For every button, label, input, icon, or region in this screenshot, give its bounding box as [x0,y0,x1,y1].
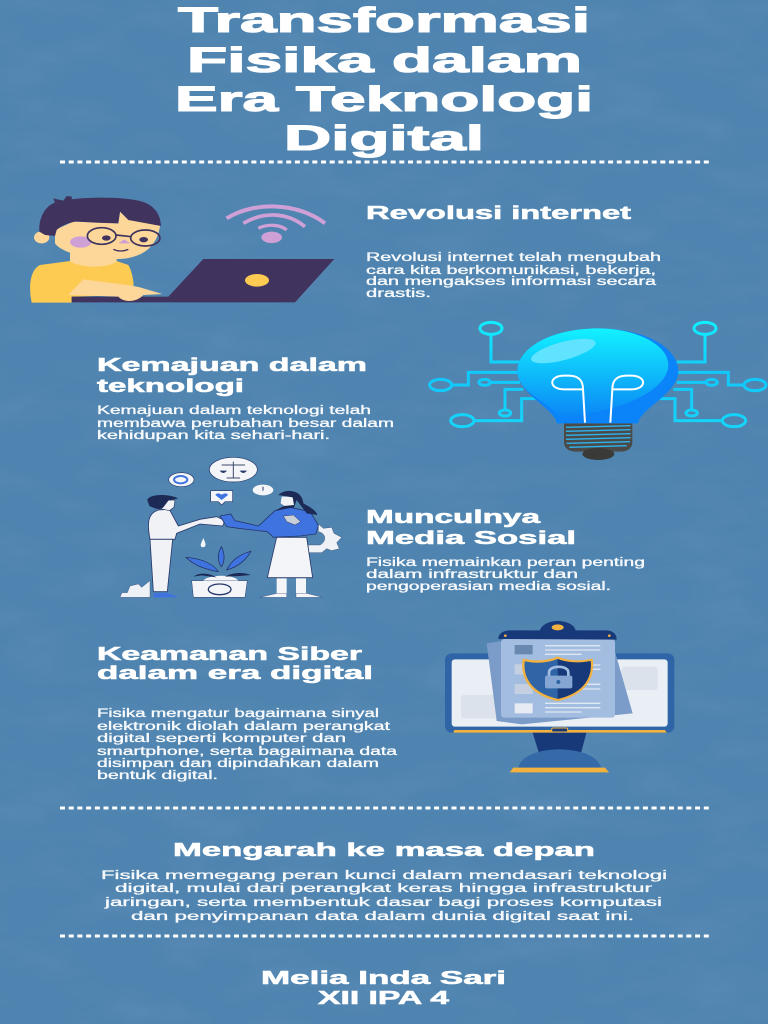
icon: boy with laptop and wifi [30,196,334,303]
section: Revolusi internet [366,203,661,300]
section: Mengarah ke masa depan: Mengarah ke masa depan [173,840,595,860]
icon: light bulb circuit [430,322,766,460]
section: Keamanan Siber dalam era digital: Fisika mengatur bagaimana sinyal [97,708,379,720]
section: Munculnya Media Sosial: dalam infrastruktur dan [366,569,578,581]
section: Mengarah ke masa depan: dan penyimpanan data dalam dunia digital saat ini. [131,911,634,923]
section: Kemajuan dalam teknologi: Kemajuan dalam teknologi telah [97,405,371,417]
section: Keamanan Siber dalam era digital [97,644,398,782]
section: Revolusi internet: Revolusi internet telah mengubah [366,252,661,264]
author credit [261,968,506,1008]
section: Kemajuan dalam teknologi [97,355,394,442]
icon: handshake illustration [120,457,342,597]
section: Keamanan Siber dalam era digital: bentuk digital. [97,770,218,782]
section: Revolusi internet: drastis. [366,288,431,300]
section: Mengarah ke masa depan: jaringan, serta membentuk dasar bagi proses komputasi [103,897,662,909]
section: Kemajuan dalam teknologi: teknologi [97,376,244,396]
section: Kemajuan dalam teknologi: Kemajuan dalam [97,355,367,375]
section: Revolusi internet: Revolusi internet [366,203,631,223]
section: Munculnya Media Sosial: Media Sosial [366,528,576,548]
section: Munculnya Media Sosial: Munculnya [366,507,542,527]
section: Munculnya Media Sosial: Fisika memainkan peran penting [366,557,645,569]
section: Revolusi internet: cara kita berkomunikasi, bekerja, [366,265,656,277]
section: Munculnya Media Sosial [366,507,645,593]
icon: monitor with security shield [445,621,674,772]
title [175,1,593,158]
section: Mengarah ke masa depan: Fisika memegang peran kunci dalam mendasari teknologi [101,870,667,882]
section: Mengarah ke masa depan [101,840,667,923]
section: Keamanan Siber dalam era digital: dalam era digital [97,663,373,683]
title: Digital [284,119,484,158]
title: Era Teknologi [175,80,593,119]
section: Munculnya Media Sosial: pengoperasian media sosial. [366,581,611,593]
author credit: Melia Inda Sari [261,968,506,988]
section: Kemajuan dalam teknologi: kehidupan kita sehari-hari. [97,430,330,442]
section: Keamanan Siber dalam era digital: disimpan dan dipindahkan dalam [97,758,379,770]
section: Keamanan Siber dalam era digital: Keamanan Siber [97,644,362,664]
author credit: XII IPA 4 [318,988,449,1008]
section: Keamanan Siber dalam era digital: smartphone, serta bagaimana data [97,746,398,758]
title: Transformasi [178,1,590,40]
section: Mengarah ke masa depan: digital, mulai dari perangkat keras hingga infrastruktur [115,883,652,895]
title: Fisika dalam [187,41,582,80]
section: Keamanan Siber dalam era digital: digital seperti komputer dan [97,733,346,745]
section: Kemajuan dalam teknologi: membawa perubahan besar dalam [97,418,394,430]
section: Revolusi internet: dan mengakses informasi secara [366,276,657,288]
section: Keamanan Siber dalam era digital: elektronik diolah dalam perangkat [97,721,391,733]
